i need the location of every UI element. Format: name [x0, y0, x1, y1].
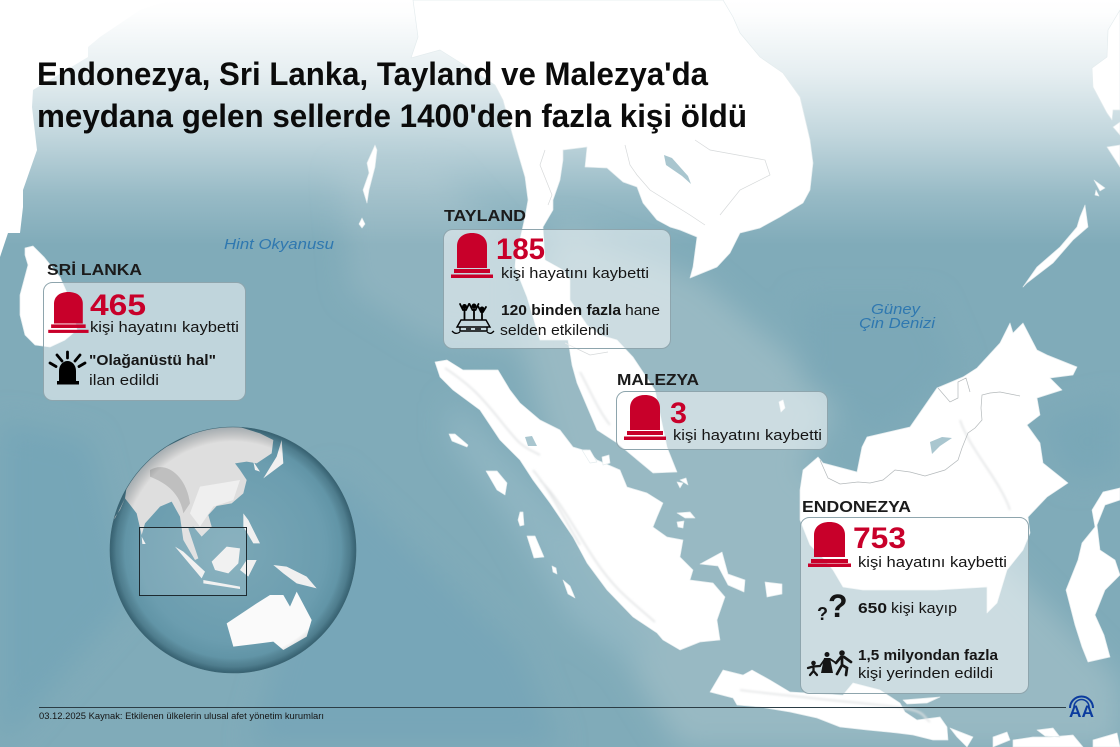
land: Java — [710, 670, 948, 740]
land: Sri Lanka — [20, 246, 77, 347]
sea label: Hint Okyanusu: Hint Okyanusu — [224, 236, 335, 253]
icon: emergency siren — [50, 352, 85, 384]
missing people note — [858, 600, 957, 617]
land: Tioman and Natuna — [779, 400, 785, 412]
icon: gravestone — [48, 292, 89, 333]
icon: question marks: ? — [817, 604, 828, 624]
death toll: 753 — [853, 522, 906, 555]
death toll: 3 — [670, 397, 687, 430]
panel: Sri Lanka — [44, 261, 246, 400]
death toll: 465 — [90, 289, 146, 322]
sea label: Güney Çin Denizi: Çin Denizi — [859, 315, 936, 332]
land: Riau, Bangka and Belitung — [582, 450, 782, 597]
missing people note: 650 — [858, 600, 887, 617]
icon: people on flooded house roof — [452, 304, 494, 333]
icon: question marks — [817, 588, 848, 624]
panel: Tayland — [444, 208, 670, 348]
icon: gravestone — [451, 233, 493, 278]
land: Sulawesi — [1066, 488, 1120, 662]
title — [37, 56, 747, 134]
sea label: Güney Çin Denizi — [859, 301, 936, 332]
death toll caption: kişi hayatını kaybetti — [501, 265, 649, 282]
land: Andaman and Nicobar islands — [359, 145, 377, 228]
land: India — [0, 0, 170, 257]
icon: gravestone — [624, 395, 666, 440]
emergency note: "Olağanüstü hal" — [89, 352, 216, 369]
source note: 03.12.2025 Kaynak: Etkilenen ülkelerin ulusal afet yönetim kurumları — [39, 711, 324, 721]
displaced people note: kişi yerinden edildi — [858, 665, 993, 682]
country heading: Malezya: MALEZYA — [617, 372, 699, 389]
land: Madura — [903, 697, 940, 704]
country heading: Endonezya: ENDONEZYA — [802, 499, 911, 516]
affected households note — [500, 302, 660, 339]
displaced people note — [858, 647, 999, 682]
title: meydana gelen sellerde 1400'den fazla kişi öldü — [37, 98, 747, 134]
land: Indochina and Malay Peninsula — [411, 0, 813, 473]
land: Palawan — [1023, 205, 1088, 287]
panel: Malezya — [616, 372, 828, 450]
map: terrain and borders — [445, 140, 1020, 722]
country heading: Sri Lanka: SRİ LANKA — [47, 261, 142, 279]
country heading: Tayland: TAYLAND — [444, 208, 526, 225]
death toll caption: kişi hayatını kaybetti — [90, 319, 239, 336]
logo: AA: AA — [1069, 702, 1094, 721]
panel background — [444, 230, 670, 348]
icon: gravestone — [808, 522, 851, 567]
land: Luzon and Philippines — [1092, 10, 1120, 196]
title: Endonezya, Sri Lanka, Tayland ve Malezya'da — [37, 56, 708, 92]
panel background — [44, 282, 246, 400]
land: Borneo — [800, 323, 1077, 613]
locator rectangle — [140, 528, 246, 596]
icon: question marks: ? — [828, 588, 848, 624]
globe land masses — [110, 425, 317, 650]
footer rule — [39, 706, 1066, 708]
icon: displaced family — [808, 650, 851, 675]
affected households note: 120 binden fazla — [501, 302, 622, 319]
death toll: 185 — [496, 233, 545, 266]
death toll caption: kişi hayatını kaybetti — [858, 554, 1007, 571]
panel: Endonezya — [800, 499, 1028, 694]
locator globe — [110, 425, 356, 673]
death toll caption: kişi hayatını kaybetti — [673, 427, 822, 444]
missing people note: kişi kayıp — [891, 600, 957, 617]
affected households note: selden etkilendi — [500, 322, 609, 339]
panel background — [616, 392, 828, 450]
land: Lesser Sunda islands — [950, 728, 1120, 747]
land: Sumatra — [435, 360, 725, 650]
displaced people note: 1,5 milyondan fazla — [858, 647, 999, 664]
land: Simeulue, Nias and Mentawai islands — [449, 434, 575, 598]
emergency note — [89, 352, 216, 389]
emergency note: ilan edildi — [89, 372, 159, 389]
affected households note: hane — [625, 302, 660, 319]
panel background — [800, 518, 1028, 694]
sea label: Güney Çin Denizi: Güney — [871, 301, 922, 318]
